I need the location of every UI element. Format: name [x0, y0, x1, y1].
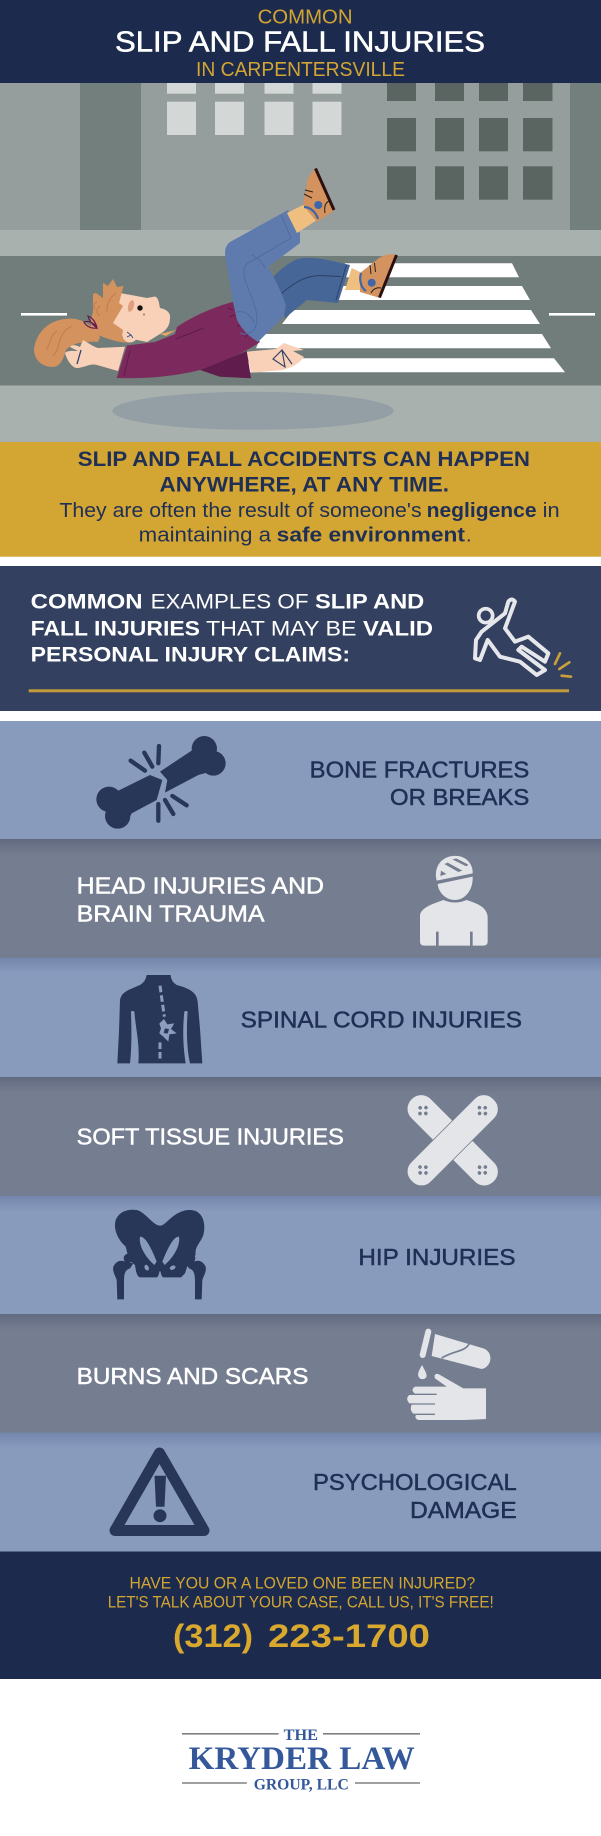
examples heading: SLIP AND: [315, 589, 424, 613]
label: psychological damage: [313, 1469, 517, 1523]
call to action panel: [0, 1552, 601, 1679]
row: spinal cord injuries: [0, 958, 601, 1077]
label: head injuries: BRAIN TRAUMA: [77, 901, 265, 927]
statement body: maintaining a: [139, 525, 272, 547]
label: head injuries: HEAD INJURIES AND: [77, 872, 324, 898]
label: bone fractures: [310, 757, 529, 810]
call to action text: [108, 1574, 494, 1612]
statement body: .: [466, 525, 472, 547]
phone number: (312): [173, 1618, 253, 1654]
icon: falling figure: [475, 599, 571, 677]
row: head injuries: [0, 839, 601, 958]
label: burns and scars: BURNS AND SCARS: [77, 1363, 308, 1389]
street scene illustration: [0, 83, 601, 442]
phone number: 223-1700: [268, 1618, 430, 1654]
examples heading: EXAMPLES OF: [151, 589, 308, 613]
statement body: negligence: [427, 500, 537, 522]
examples heading: VALID: [363, 617, 433, 641]
row: bone fractures: [0, 721, 601, 839]
label: psychological damage: DAMAGE: [410, 1497, 517, 1523]
label: bone fractures: BONE FRACTURES: [310, 757, 529, 783]
label: psychological damage: PSYCHOLOGICAL: [313, 1469, 517, 1495]
examples heading: THAT MAY BE: [206, 617, 356, 641]
icon: broken bone: [96, 736, 226, 829]
logo: the kryder law group: KRYDER LAW: [189, 1741, 415, 1777]
icon: pelvis: [113, 1210, 206, 1299]
illustration: falling person: [34, 168, 397, 378]
navy examples panel: [0, 566, 601, 711]
logo: the kryder law group: THE: [284, 1727, 318, 1744]
row: psychological damage: [0, 1432, 601, 1552]
title: common: COMMON: [258, 6, 353, 28]
icon: crossed bandages: [402, 1089, 504, 1191]
label: spinal cord injuries: SPINAL CORD INJURIES: [241, 1007, 522, 1033]
row: burns and scars: [0, 1314, 601, 1432]
statement heading: [78, 447, 530, 497]
examples heading: COMMON: [31, 589, 143, 613]
label: bone fractures: OR BREAKS: [390, 784, 529, 810]
label: hip injuries: HIP INJURIES: [358, 1244, 516, 1270]
examples heading: FALL INJURIES: [31, 617, 200, 641]
examples heading: PERSONAL INJURY CLAIMS:: [31, 643, 350, 667]
logo: the kryder law group: GROUP, LLC: [254, 1776, 349, 1794]
title: in carpentersville: IN CARPENTERSVILLE: [196, 59, 405, 81]
gold statement panel: [0, 442, 601, 557]
call to action text: HAVE YOU OR A LOVED ONE BEEN INJURED?: [130, 1574, 475, 1592]
statement body: They are often the result of someone's: [59, 500, 422, 522]
statement body: safe environment: [277, 525, 465, 547]
row: hip injuries: [0, 1196, 601, 1314]
header panel: [0, 0, 601, 83]
statement body: in: [543, 500, 560, 522]
row: soft tissue injuries: [0, 1077, 601, 1196]
label: soft tissue injuries: SOFT TISSUE INJURIES: [77, 1123, 344, 1149]
statement heading: ANYWHERE, AT ANY TIME.: [160, 473, 449, 497]
icon: chemical burn on hand: [407, 1332, 490, 1420]
statement body: [59, 500, 560, 547]
icon: bandaged head: [420, 856, 488, 946]
icon: spine: [117, 975, 202, 1063]
title: slip and fall injuries: SLIP AND FALL INJURIES: [115, 27, 485, 59]
statement heading: SLIP AND FALL ACCIDENTS CAN HAPPEN: [78, 447, 530, 471]
call to action text: LET'S TALK ABOUT YOUR CASE, CALL US, IT'S FREE!: [108, 1594, 494, 1612]
label: head injuries: [77, 872, 324, 927]
examples heading: [31, 589, 433, 667]
icon: warning triangle: [115, 1453, 204, 1530]
logo: the kryder law group: [182, 1727, 420, 1794]
